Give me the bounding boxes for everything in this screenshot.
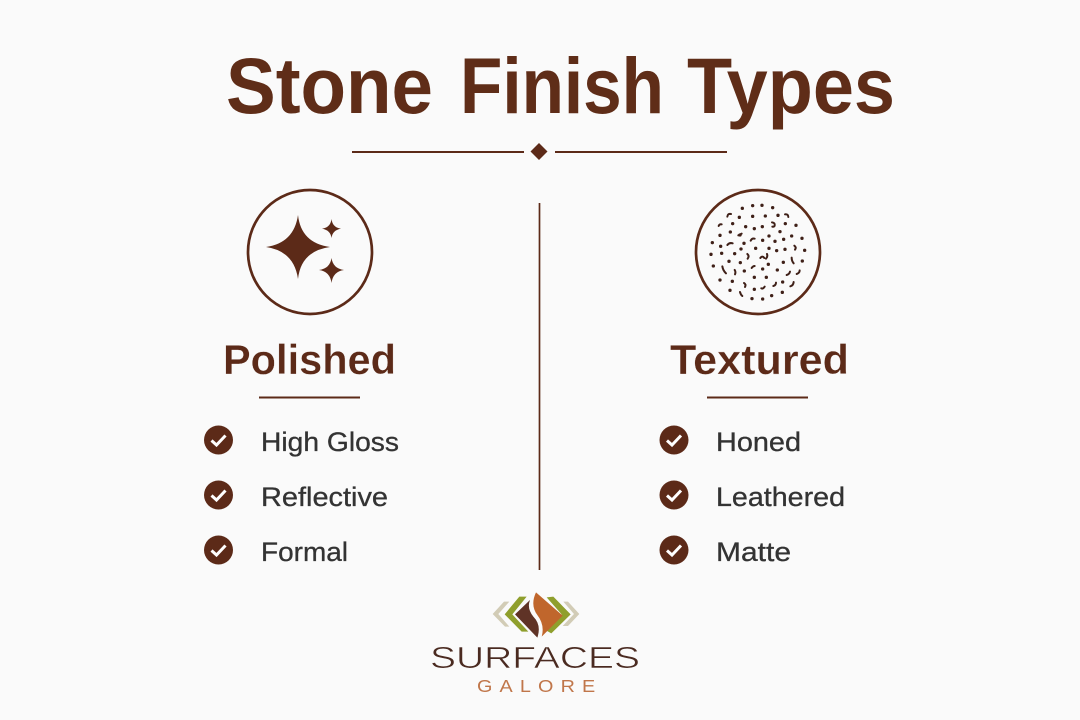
item: formal xyxy=(204,536,348,567)
heading: textured: Textured xyxy=(670,336,849,383)
icon: sparkles xyxy=(248,190,372,314)
title: Types xyxy=(687,41,895,130)
logo: surfaces galore xyxy=(430,592,640,697)
item: matte: Matte xyxy=(716,537,791,567)
item: leathered: Leathered xyxy=(716,482,845,512)
heading: polished: Polished xyxy=(223,336,396,383)
title xyxy=(226,41,895,130)
logo wordmark: SURFACES xyxy=(430,640,640,675)
item: high gloss: High Gloss xyxy=(261,427,399,457)
icon: speckled circle xyxy=(696,190,820,314)
panel: polished xyxy=(204,190,399,567)
title: Finish xyxy=(460,41,664,130)
item: reflective xyxy=(204,480,388,512)
item: honed xyxy=(660,426,801,457)
title: Stone xyxy=(226,41,433,130)
item: matte xyxy=(660,536,791,567)
item: formal: Formal xyxy=(261,537,348,567)
title divider xyxy=(352,143,727,160)
logo mark xyxy=(493,592,579,638)
item: reflective: Reflective xyxy=(261,482,388,512)
list: polished features xyxy=(204,426,399,567)
panel: textured xyxy=(660,190,849,567)
item: high gloss xyxy=(204,426,399,457)
list: textured features xyxy=(660,426,845,567)
logo tagline: GALORE xyxy=(477,677,602,697)
item: honed: Honed xyxy=(716,427,801,457)
item: leathered xyxy=(660,480,845,512)
